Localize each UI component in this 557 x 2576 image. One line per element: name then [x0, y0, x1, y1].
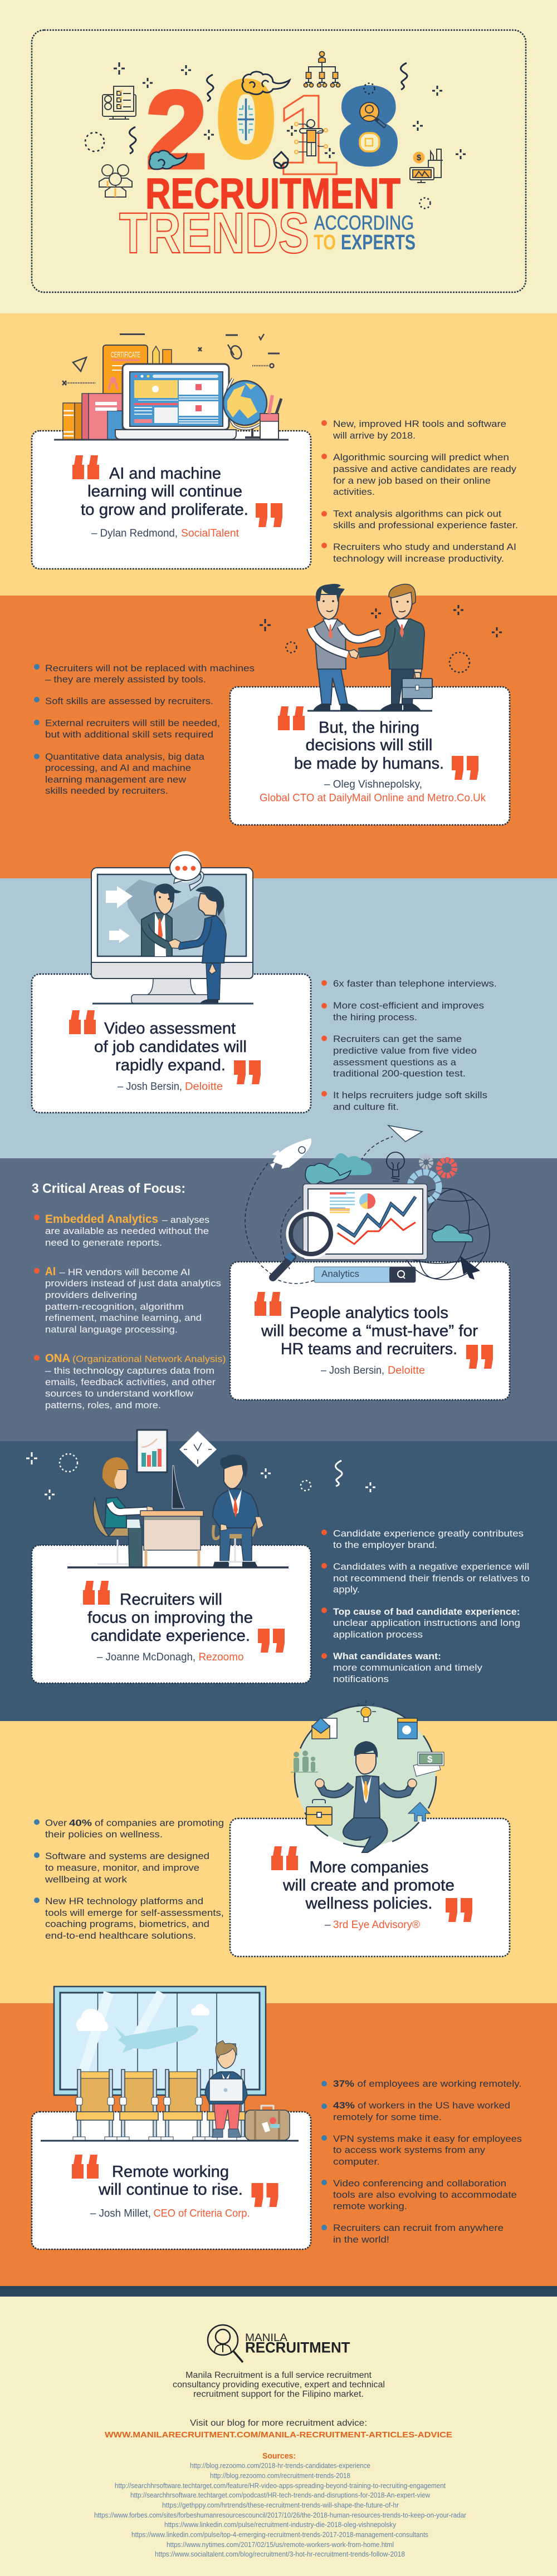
bullet list: Software and systems are designed — [45, 1851, 209, 1861]
focus list: – analyses — [162, 1215, 209, 1225]
bullet list — [321, 2078, 522, 2245]
company description: Manila Recruitment is a full service recruitment — [185, 2371, 372, 2380]
quote text: to grow and proliferate. — [81, 501, 248, 519]
quote text: More companies — [310, 1859, 429, 1876]
man with laptop — [205, 2041, 247, 2137]
company description — [173, 2371, 385, 2399]
sources list: http://searchhrsoftware.techtarget.com/feature/HR-video-apps-spreading-beyond-training-to-recruiting-engagement — [115, 2482, 446, 2490]
attribution: – Josh Millet, — [90, 2208, 151, 2220]
icon: cloud outline on zero — [242, 72, 290, 95]
title: to: TO — [314, 231, 336, 254]
right man — [349, 584, 424, 711]
focus list: natural language processing. — [45, 1324, 178, 1335]
recruiter — [102, 1457, 154, 1567]
search box: Analytics — [321, 1269, 359, 1279]
bullet list: 37% — [333, 2078, 354, 2089]
bullet list: 6x faster than telephone interviews. — [333, 979, 497, 989]
attribution: – Josh Bersin, — [118, 1081, 182, 1093]
quote text: learning will continue — [87, 483, 242, 500]
magnifying glass — [273, 1211, 334, 1277]
bullet list: but with additional skill sets required — [45, 729, 213, 740]
bullet list — [321, 419, 518, 564]
focus list: sources to understand workflow — [45, 1388, 194, 1399]
bullet list: Soft skills are assessed by recruiters. — [45, 696, 213, 706]
attribution: Deloitte — [388, 1365, 425, 1377]
panel: hiring decisions by humans — [0, 584, 557, 878]
bullet list: – they are merely assisted by tools. — [45, 674, 206, 685]
quote text — [94, 1020, 247, 1074]
monitor — [91, 868, 253, 1004]
quote text: focus on improving the — [87, 1609, 253, 1626]
globe wireframe — [398, 1184, 490, 1284]
quote text: Remote working — [112, 2163, 229, 2181]
attribution — [118, 1081, 223, 1093]
wall chart — [137, 1430, 167, 1472]
focus list: refinement, machine learning, and — [45, 1312, 202, 1323]
sources list: https://gethppy.com/hrtrends/these-recruitment-trends-will-shape-the-future-of-hr — [162, 2501, 399, 2509]
open quote — [72, 455, 99, 479]
bullet list: and culture fit. — [333, 1102, 399, 1112]
quote text: HR teams and recruiters. — [281, 1340, 457, 1358]
quote text — [261, 1304, 478, 1358]
sources list: http://blog.rezoomo.com/recruitment-trends-2018 — [210, 2472, 350, 2480]
bullet list: processing, and AI and machine — [45, 763, 191, 773]
attribution: Rezoomo — [198, 1651, 244, 1663]
bullet list: Recruiters can get the same — [333, 1034, 462, 1044]
year 2018: 0 — [216, 58, 277, 180]
close quote — [256, 503, 282, 527]
bullet list: to access work systems from any — [333, 2145, 486, 2155]
bullet list: Top cause of bad candidate experience: — [333, 1606, 520, 1617]
bulb — [387, 1152, 404, 1181]
laptop — [115, 364, 236, 439]
focus list: pattern-recognition, algorithm — [45, 1301, 184, 1312]
year 2018: 8 — [338, 65, 399, 187]
bullet list: It helps recruiters judge soft skills — [333, 1090, 487, 1100]
year 2018: 2 — [146, 68, 207, 191]
sparkles and squiggles — [85, 62, 466, 208]
title: trends: TRENDS — [119, 201, 309, 265]
bulb — [356, 1700, 376, 1722]
open quote — [278, 706, 305, 730]
quote text: wellness policies. — [305, 1895, 432, 1913]
pencil and ruler — [109, 346, 172, 390]
note — [398, 1718, 417, 1739]
bullet list: Over — [45, 1818, 67, 1828]
rocket — [270, 1138, 311, 1169]
title: experts: EXPERTS — [341, 231, 416, 254]
doodles — [62, 334, 280, 385]
bullet list: the hiring process. — [333, 1012, 417, 1022]
bullet list: tools will emerge for self-assessments, — [45, 1908, 224, 1918]
certificate — [103, 345, 148, 398]
quote text: candidate experience. — [91, 1627, 250, 1645]
quote card — [32, 2112, 311, 2249]
icon: dollar label: $ — [417, 153, 422, 163]
logo: RECRUITMENT — [245, 2339, 350, 2356]
bullet list: New, improved HR tools and software — [333, 419, 506, 429]
quote text — [87, 1591, 253, 1645]
quote text — [282, 1859, 455, 1913]
panel: AI and machine learning — [0, 313, 557, 596]
attribution: – Josh Bersin, — [321, 1365, 384, 1377]
recruiter chair — [94, 1497, 134, 1536]
bullet list: their policies on wellness. — [45, 1829, 163, 1840]
panel: video assessment — [0, 851, 557, 1158]
illustration: interview at desk — [67, 1430, 289, 1567]
company description: recruitment support for the Filipino market. — [193, 2390, 364, 2399]
bullet list: predictive value from five video — [333, 1045, 477, 1056]
sources list — [94, 2462, 466, 2558]
suitcase — [245, 2106, 290, 2140]
bullet list: coaching programs, biometrics, and — [45, 1919, 209, 1929]
panel: people analytics — [0, 1125, 557, 1441]
bullet list: wellbeing at work — [45, 1874, 128, 1885]
bullet list: of workers in the US have worked — [358, 2100, 510, 2111]
quote card — [32, 1545, 311, 1683]
open quote — [69, 1010, 96, 1034]
panel: wellness — [0, 1700, 557, 2003]
attribution: 3rd Eye Advisory® — [333, 1919, 420, 1931]
attribution — [260, 779, 486, 804]
attribution — [91, 528, 240, 539]
focus list: AI — [45, 1265, 56, 1278]
sources list: https://www.forbes.com/sites/forbeshumanresourcescouncil/2017/10/26/the-2018-human-resources-trends-to-keep-on-your-radar — [94, 2511, 466, 2519]
bullet list: Text analysis algorithms can pick out — [333, 509, 501, 519]
shelf line — [54, 439, 289, 441]
panel: candidate experience — [0, 1430, 557, 1721]
bullet list — [34, 1818, 224, 1941]
focus list: are available as needed without the — [45, 1226, 209, 1236]
blog call to action: Visit our blog for more recruitment advice: — [190, 2418, 367, 2428]
bullet list: remotely for some time. — [333, 2112, 442, 2122]
quote text: will continue to rise. — [98, 2181, 243, 2199]
attribution — [97, 1651, 244, 1663]
quote text — [294, 719, 444, 773]
bullet list: to measure, monitor, and improve — [45, 1862, 199, 1873]
icon: monitor and pen cup — [410, 149, 443, 183]
quote card — [230, 1262, 510, 1400]
bullet list: Candidate experience greatly contributes — [333, 1528, 524, 1538]
bullet list: computer. — [333, 2156, 380, 2167]
quote text: of job candidates will — [94, 1038, 247, 1056]
quote text: AI and machine — [109, 465, 221, 483]
sources list: https://www.linkedin.com/pulse/recruitment-industry-die-2018-oleg-vishnepolsky — [164, 2521, 397, 2529]
quote text: will create and promote — [282, 1877, 455, 1895]
money: $ — [427, 1754, 433, 1764]
candidate — [213, 1454, 263, 1567]
focus list: (Organizational Network Analysis) — [72, 1354, 226, 1364]
year 2018 — [146, 58, 399, 199]
blog url: WWW.MANILARECRUITMENT.COM/MANILA-RECRUITMENT-ARTICLES-ADVICE — [105, 2430, 452, 2440]
quote text: People analytics tools — [290, 1304, 448, 1322]
bullet list: technology will increase productivity. — [333, 553, 504, 564]
illustration: two men shaking hands — [307, 584, 432, 711]
quote text: will become a “must-have” for — [261, 1323, 478, 1340]
sources list: https://www.linkedin.com/pulse/top-4-emerging-recruitment-trends-2017-2018-management-consultants — [131, 2531, 428, 2539]
left man — [311, 584, 380, 711]
attribution: – — [325, 1919, 331, 1931]
bullet list: to the employer brand. — [333, 1540, 437, 1550]
bullet list: more communication and timely — [333, 1662, 483, 1673]
books — [63, 394, 123, 440]
focus list: – HR vendors will become AI — [59, 1267, 190, 1277]
globe and pen cup — [223, 378, 281, 439]
dotted frame — [32, 30, 526, 292]
bullet list: New HR technology platforms and — [45, 1896, 203, 1906]
bullet list: VPN systems make it easy for employees — [333, 2133, 522, 2144]
bullet list: apply. — [333, 1584, 360, 1595]
bullet list: What candidates want: — [333, 1651, 441, 1661]
bullet list: skills needed by recruiters. — [45, 785, 168, 796]
close quote — [446, 1898, 472, 1922]
illustration: airport lounge — [41, 1987, 299, 2141]
bullet list — [321, 979, 497, 1112]
bullet list: of employees are working remotely. — [358, 2078, 521, 2089]
quote text: Video assessment — [104, 1020, 236, 1038]
house — [408, 1802, 430, 1821]
sources heading: Sources: — [262, 2452, 296, 2461]
bullet list: assessment questions as a — [333, 1057, 457, 1068]
focus list — [34, 1213, 226, 1410]
clouds — [76, 2004, 209, 2031]
bullet list: Algorithmic sourcing will predict when — [333, 452, 509, 463]
icon: leaf — [274, 152, 288, 168]
bullet list: Recruiters can recruit from anywhere — [333, 2223, 504, 2233]
bullet list: Recruiters will not be replaced with machines — [45, 663, 255, 674]
open quote — [271, 1846, 298, 1870]
bullet list: will arrive by 2018. — [333, 430, 416, 441]
envelope — [312, 1718, 337, 1739]
clouds — [305, 1153, 473, 1242]
bullet list: remote working. — [333, 2201, 407, 2211]
bullet list: unclear application instructions and long — [333, 1618, 520, 1628]
title: according: ACCORDING — [314, 212, 414, 234]
close quote — [452, 756, 478, 780]
paper plane — [388, 1125, 422, 1142]
icon: group of people — [99, 165, 132, 197]
bullet list: Candidates with a negative experience will — [333, 1561, 529, 1572]
man in suit — [168, 886, 226, 1004]
focus list: providers delivering — [45, 1290, 137, 1300]
open quote — [255, 1292, 281, 1316]
bullet list: 40% — [69, 1818, 92, 1828]
icon: org chart — [304, 51, 340, 87]
panel: hero header — [0, 0, 557, 313]
bullet list: not recommend their friends or relatives to — [333, 1573, 530, 1584]
desk — [140, 1511, 203, 1567]
illustration: laptop, books and globe — [54, 334, 289, 440]
digit zero window pattern — [238, 99, 254, 140]
quote text: decisions will still — [305, 736, 432, 754]
attribution — [321, 1365, 425, 1377]
dashed circle on eight — [364, 83, 374, 94]
certificate details — [112, 360, 140, 361]
bullet list: notifications — [333, 1674, 389, 1684]
icon: man with circuits — [287, 120, 335, 158]
illustration: meditating businessman — [291, 1700, 444, 1852]
gears — [410, 1157, 455, 1201]
focus list: providers instead of just data analytics — [45, 1278, 221, 1289]
bullet list: traditional 200-question test. — [333, 1068, 466, 1079]
bullet list: end-to-end healthcare solutions. — [45, 1930, 196, 1941]
bullet list: Quantitative data analysis, big data — [45, 751, 205, 762]
quote text: But, the hiring — [319, 719, 419, 737]
bullet list — [321, 1528, 530, 1684]
bullet list: Video conferencing and collaboration — [333, 2178, 506, 2189]
window — [54, 1987, 266, 2095]
bullet list: 43% — [333, 2100, 355, 2111]
green circle — [295, 1706, 436, 1846]
focus list: ONA — [45, 1352, 70, 1365]
icon: teal cloud on two — [149, 150, 187, 169]
man in screen — [141, 883, 182, 956]
bullet list: skills and professional experience faster. — [333, 520, 518, 530]
heading: critical areas of focus: 3 Critical Areas of Focus: — [32, 1181, 185, 1196]
company description: consultancy providing executive, expert and technical — [173, 2380, 385, 2390]
bullet list: of companies are promoting — [95, 1818, 224, 1828]
title: recruitment: RECRUITMENT — [145, 170, 400, 218]
family — [291, 1751, 318, 1772]
search box — [314, 1267, 416, 1282]
bullet list: learning management are new — [45, 774, 187, 785]
sources list: http://searchhrsoftware.techtarget.com/podcast/HR-tech-trends-and-disruptions-for-2018-An-expert-view — [130, 2491, 431, 2499]
attribution: – Oleg Vishnepolsky, — [324, 779, 422, 790]
logo: MANILA — [245, 2332, 287, 2344]
icon: checklist monitor — [102, 86, 136, 119]
meditating man — [315, 1741, 417, 1852]
chairs — [73, 2069, 249, 2141]
cursor — [460, 1256, 480, 1280]
icon: magnifier with person — [360, 102, 385, 127]
doodles — [260, 605, 502, 672]
open quote — [72, 2155, 99, 2179]
bullet list: Recruiters who study and understand AI — [333, 542, 516, 552]
quote card — [32, 431, 311, 569]
attribution: Global CTO at DailyMail Online and Metro.Co.Uk — [260, 793, 486, 804]
bullet list: passive and active candidates are ready — [333, 464, 517, 474]
close quote — [258, 1629, 285, 1653]
year 2018: 1 — [276, 71, 340, 199]
sources list: http://blog.rezoomo.com/2018-hr-trends-candidates-experience — [190, 2462, 370, 2470]
focus list: – this technology captures data from — [45, 1365, 214, 1376]
briefcase — [306, 1800, 332, 1825]
wall clock — [179, 1431, 217, 1467]
briefcase — [402, 672, 432, 699]
bullet list: tools are also evolving to accommodate — [333, 2190, 517, 2200]
bullet list: in the world! — [333, 2234, 389, 2245]
bullet list: for a new job based on their online — [333, 475, 491, 486]
bullet list — [34, 663, 255, 796]
panel: remote working — [0, 1987, 557, 2286]
attribution: SocialTalent — [181, 528, 240, 539]
close quote — [466, 1345, 493, 1369]
navy divider band — [0, 2286, 557, 2297]
open quote — [83, 1581, 110, 1605]
illustration: video interview on monitor — [91, 851, 253, 1004]
money — [413, 1752, 444, 1776]
logo — [208, 2325, 350, 2362]
focus list: emails, feedback activities, and other — [45, 1377, 216, 1387]
bullet list: More cost-efficient and improves — [333, 1000, 484, 1011]
digit eight centres — [352, 96, 385, 158]
desk monitor — [172, 1466, 184, 1508]
illustration: analytics dashboard — [245, 1125, 490, 1284]
attribution: – Joanne McDonagh, — [97, 1651, 196, 1663]
quote text: Recruiters will — [120, 1591, 222, 1609]
focus list: patterns, roles, and more. — [45, 1400, 161, 1410]
illustration: laptop, books and globe: CERTIFICATE — [111, 350, 140, 360]
attribution: – Dylan Redmond, — [91, 528, 178, 539]
monitor with chart — [303, 1184, 427, 1260]
quote text — [81, 465, 248, 519]
bullet list: application process — [333, 1629, 423, 1640]
attribution — [90, 2208, 250, 2220]
panel: footer — [0, 2297, 557, 2576]
attribution: Deloitte — [185, 1081, 223, 1093]
sources list: https://www.nytimes.com/2017/02/15/us/remote-workers-work-from-home.html — [167, 2541, 394, 2549]
speech bubbles — [170, 851, 204, 891]
bullet list: activities. — [333, 486, 375, 497]
bullet list: External recruiters will still be needed, — [45, 718, 220, 728]
close quote — [252, 2183, 278, 2207]
attribution: CEO of Criteria Corp. — [154, 2208, 250, 2220]
quote card — [230, 1818, 510, 1956]
doodles — [26, 1452, 375, 1500]
quote text — [98, 2163, 243, 2199]
sources list: https://www.socialtalent.com/blog/recruitment/3-hot-hr-recruitment-trends-follow-2018 — [155, 2550, 405, 2558]
focus list: need to generate reports. — [45, 1237, 162, 1248]
quote text: be made by humans. — [294, 755, 444, 773]
focus list: Embedded Analytics — [45, 1213, 158, 1226]
close quote — [234, 1060, 261, 1084]
airplane — [114, 2026, 198, 2053]
quote card — [32, 974, 311, 1113]
flight paths — [245, 1137, 393, 1284]
quote card — [230, 687, 510, 825]
quote text: rapidly expand. — [115, 1056, 226, 1074]
